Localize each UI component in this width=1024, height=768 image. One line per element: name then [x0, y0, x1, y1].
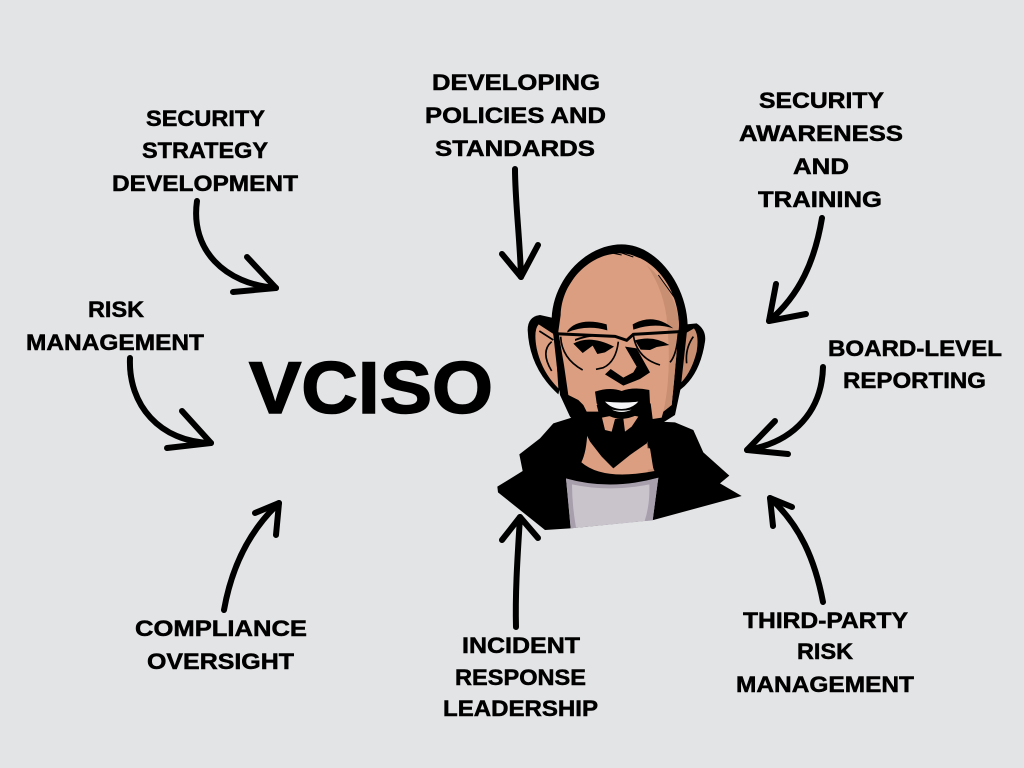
head outline and beard	[552, 244, 688, 468]
label: board-level reporting	[828, 336, 1002, 393]
portrait: bald man with glasses and beard	[497, 244, 742, 530]
label: security awareness and training: SECURITY	[759, 88, 884, 113]
label: incident response leadership: INCIDENT	[462, 633, 581, 658]
ear inner lines	[539, 331, 693, 371]
nose	[605, 347, 650, 386]
label: security strategy development	[112, 106, 299, 196]
label: security awareness and training: AWARENESS	[739, 121, 903, 146]
arrow: third-party risk	[770, 498, 823, 602]
arrow: risk management	[130, 358, 211, 448]
label: security awareness and training: TRAINING	[758, 187, 882, 212]
arrow: board-level reporting	[747, 367, 823, 454]
label: developing policies and standards: STANDARDS	[435, 136, 595, 161]
jacket	[497, 418, 742, 530]
label: compliance oversight: OVERSIGHT	[147, 649, 295, 674]
label: risk management	[26, 297, 205, 355]
arrow: compliance oversight	[224, 503, 279, 610]
glasses	[553, 332, 680, 340]
label: third-party risk management: THIRD-PARTY	[743, 608, 908, 633]
eyes	[573, 335, 669, 354]
arrow: developing policies	[502, 169, 538, 277]
label: risk management: MANAGEMENT	[26, 330, 205, 355]
label: security strategy development: DEVELOPMENT	[112, 171, 299, 196]
label: compliance oversight: COMPLIANCE	[135, 616, 307, 641]
label: board-level reporting: REPORTING	[843, 368, 986, 393]
label: board-level reporting: BOARD-LEVEL	[828, 336, 1002, 361]
label: security awareness and training: AND	[793, 154, 849, 179]
label: incident response leadership	[443, 633, 598, 721]
arrow: incident response	[502, 517, 538, 627]
label: third-party risk management	[736, 608, 915, 697]
arrow: security awareness	[769, 218, 822, 321]
eyebrows	[567, 319, 673, 332]
label: developing policies and standards	[425, 70, 606, 161]
label: security awareness and training	[739, 88, 903, 212]
label: developing policies and standards: POLICIES AND	[425, 103, 606, 128]
t-shirt	[566, 478, 658, 528]
ears	[528, 315, 565, 394]
hair stubble	[563, 248, 675, 298]
arrow: security strategy	[196, 201, 276, 292]
neck	[581, 432, 655, 476]
teeth	[605, 402, 638, 409]
moustache and mouth	[595, 389, 650, 419]
label: risk management: RISK	[88, 297, 144, 322]
label: security strategy development: STRATEGY	[142, 138, 268, 163]
label: compliance oversight	[135, 616, 307, 674]
title: VCISO: VCISO	[249, 348, 493, 429]
face skin	[558, 253, 679, 419]
label: developing policies and standards: DEVELOPING	[432, 70, 600, 95]
label: third-party risk management: RISK	[797, 639, 853, 664]
face shadow	[647, 265, 679, 412]
label: security strategy development: SECURITY	[146, 106, 265, 131]
label: incident response leadership: LEADERSHIP	[443, 696, 598, 721]
label: third-party risk management: MANAGEMENT	[736, 672, 915, 697]
label: incident response leadership: RESPONSE	[455, 665, 586, 690]
chin tuft	[602, 413, 638, 432]
